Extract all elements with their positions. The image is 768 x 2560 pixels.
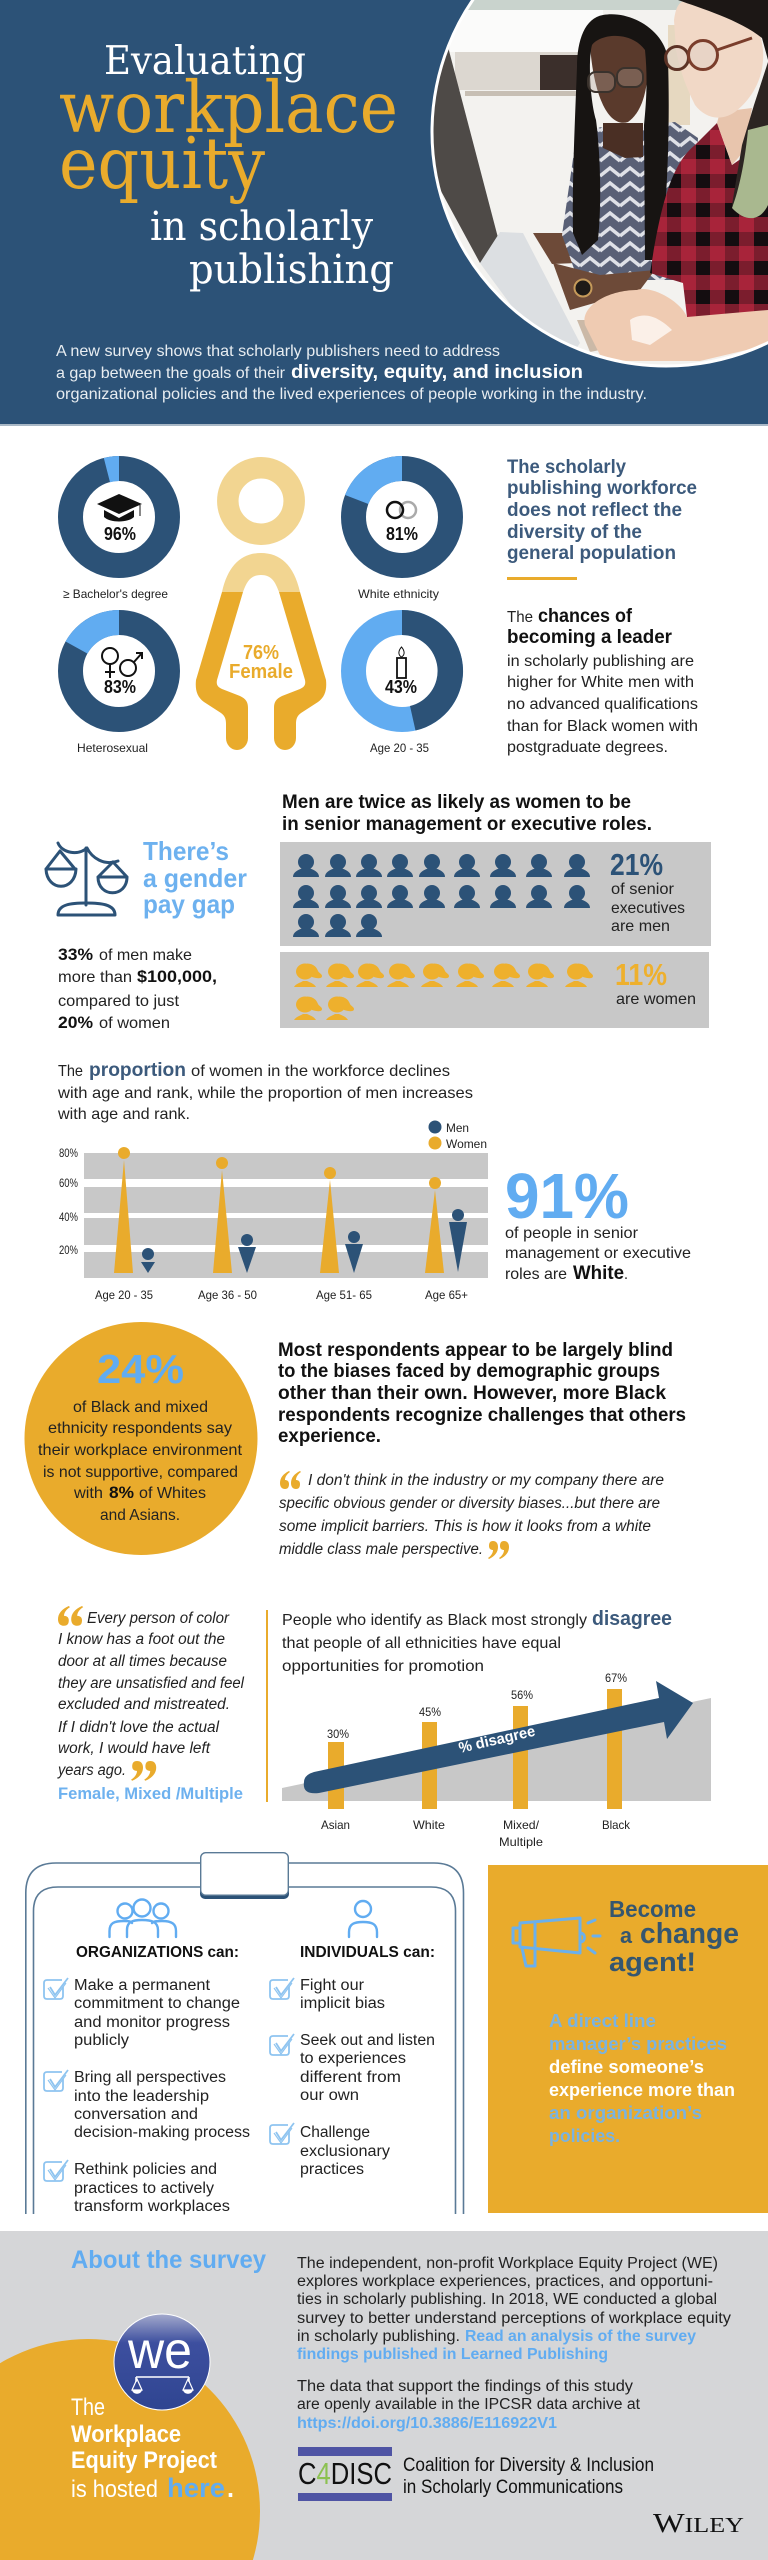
heading: there's a gender pay gap — [143, 836, 247, 919]
text: data availability: https://doi.org/10.3886/E116922V1 — [297, 2415, 557, 2432]
list: organizations can: Bring all perspectives — [74, 2069, 226, 2086]
heading: become a change agent — [609, 1896, 739, 1977]
chart: men and women by age: Age 51- 65 — [316, 1288, 372, 1302]
intro text: A new survey shows that scholarly publishers need to address — [56, 343, 500, 360]
logo: Wiley: W ILEY — [653, 2508, 744, 2538]
chart: percent disagree by ethnicity: 30% — [327, 1727, 349, 1741]
pictogram: women 11%: are women — [616, 991, 696, 1008]
text: direct line manager: policies. — [549, 2126, 620, 2146]
heading: become a change agent: agent! — [609, 1947, 696, 1977]
text: chances of becoming a leader: no advanced qualifications — [507, 696, 698, 713]
text: direct line manager: experience more than — [549, 2080, 735, 2100]
text: workplace equity project hosted here: is hosted — [71, 2476, 158, 2503]
intro text: diversity, equity, and inclusion — [291, 362, 583, 383]
stat: 91% white: roles are — [505, 1266, 567, 1283]
quote: person of color: years ago. — [57, 1762, 126, 1779]
donut: bachelor's degree 96%: 96% — [104, 524, 136, 544]
text: data availability: are openly available in the IPCSR data archive at — [297, 2396, 641, 2413]
heading: there's a gender pay gap: pay gap — [143, 889, 235, 919]
chart: percent disagree by ethnicity: Multiple — [499, 1835, 543, 1849]
intro text — [56, 343, 647, 403]
chart: men and women by age: 20% — [59, 1243, 78, 1257]
chart: men and women by age: Age 20 - 35 — [95, 1288, 153, 1302]
panel: blind to biases — [278, 1340, 686, 1559]
list: individuals can: Fight our — [300, 1977, 364, 1994]
title: Evaluating — [104, 39, 306, 84]
heading: about the survey: About the survey — [71, 2246, 266, 2274]
donut: heterosexual 83% — [66, 610, 168, 755]
icon: individual person — [349, 1901, 377, 1937]
intro text: organizational policies and the lived experiences of people working in the industry. — [56, 386, 647, 403]
panel: senior management pictogram — [280, 792, 711, 1028]
text: direct line manager: manager’s practices — [549, 2034, 727, 2054]
quote: person of color — [57, 1606, 245, 1803]
heading: workforce diversity: The scholarly — [507, 457, 626, 478]
list: individuals can: practices — [300, 2161, 364, 2178]
callout: 24% gold circle: and Asians. — [100, 1507, 180, 1524]
quote: implicit barriers: middle class male perspective. — [279, 1541, 483, 1558]
list: organizations can: conversation and — [74, 2106, 198, 2123]
heading: most respondents — [278, 1340, 686, 1447]
title: workplace — [59, 66, 398, 149]
panel: become a change agent — [488, 1865, 768, 2213]
pictogram: men 21%: executives — [611, 900, 685, 917]
text: workplace equity project hosted here: here — [167, 2473, 225, 2503]
logo: C4DISC: C4DISC — [298, 2456, 392, 2491]
title: in scholarly — [150, 204, 373, 250]
stat: 91% white: White — [573, 1263, 624, 1284]
text: chances of becoming a leader: postgraduate degrees. — [507, 739, 668, 756]
pictogram: women 11% — [280, 952, 709, 1028]
quote: person of color: excluded and mistreated. — [58, 1696, 230, 1713]
list: individuals can: INDIVIDUALS can: — [300, 1944, 435, 1961]
stat: 91% white: . — [624, 1266, 628, 1283]
text: workplace equity project hosted here: Workplace — [71, 2421, 181, 2448]
text: proportion of women: with age and rank. — [57, 1106, 190, 1123]
text: people who identify as Black: People who identify as Black most strongly — [282, 1612, 587, 1629]
pictogram: men 21%: of senior — [611, 881, 675, 898]
logo: WE: we — [127, 2322, 192, 2380]
list: organizations can: decision-making process — [74, 2124, 250, 2141]
chart: men and women by age: 40% — [59, 1210, 78, 1224]
chart: percent disagree by ethnicity: Black — [602, 1818, 631, 1832]
text: proportion of women: proportion — [89, 1060, 186, 1081]
logo: C4DISC: Coalition for Diversity & Inclusion — [403, 2455, 654, 2476]
text: workplace equity project hosted here — [71, 2394, 234, 2503]
panel: gender pay gap — [46, 836, 247, 1032]
header panel — [0, 0, 768, 426]
stat: 91% white: 91% — [505, 1160, 629, 1232]
list: individuals can: Challenge — [300, 2124, 370, 2141]
quote: implicit barriers: some implicit barriers. This is how it looks from a white — [279, 1518, 651, 1535]
callout: 24% gold circle: with — [73, 1485, 103, 1502]
text: survey description: Read an analysis of the survey — [465, 2328, 696, 2345]
quote: person of color: door at all times because — [58, 1653, 227, 1670]
donut: heterosexual 83%: 83% — [104, 677, 136, 697]
text: survey description: survey to better understand perceptions of workplace equity — [297, 2310, 731, 2327]
callout: 24% gold circle: their workplace environment — [38, 1442, 243, 1459]
panel: clipboard of actions — [26, 1853, 464, 2215]
text: proportion of women: The — [58, 1063, 83, 1080]
text: chances of becoming a leader: chances of — [538, 606, 633, 627]
list: organizations can: commitment to change — [74, 1995, 240, 2012]
text: survey description: explores workplace experiences, practices, and opportuni- — [297, 2273, 713, 2290]
text: pay gap statistics: of men make — [99, 947, 192, 964]
chart: percent disagree by ethnicity: White — [413, 1818, 445, 1832]
callout: 24% gold circle: 8% — [109, 1483, 134, 1502]
text: chances of becoming a leader: than for Black women with — [507, 718, 698, 735]
heading: become a change agent: Become — [609, 1896, 696, 1922]
text: pay gap statistics — [58, 945, 217, 1032]
text: direct line manager: an organization’s — [549, 2103, 702, 2123]
list: individuals can: to experiences — [300, 2050, 406, 2067]
heading: men twice as likely: Men are twice as likely as women to be — [282, 792, 631, 813]
callout: 24% gold circle: 24% — [97, 1346, 184, 1392]
quote: person of color: work, I would have left — [58, 1740, 211, 1757]
icon: megaphone — [513, 1918, 600, 1966]
chart: men and women by age — [59, 1146, 488, 1302]
arrow: % disagree: % disagree — [457, 1723, 537, 1757]
text: pay gap statistics: of women — [99, 1015, 170, 1032]
heading: workforce diversity: diversity of the — [507, 522, 642, 543]
title — [59, 39, 398, 293]
list: organizations can: practices to actively — [74, 2180, 214, 2197]
heading: most respondents: experience. — [278, 1426, 381, 1447]
icon: scales — [46, 843, 127, 915]
callout: 24% gold circle: is not supportive, compared — [43, 1464, 238, 1481]
list: individuals can: exclusionary — [300, 2143, 390, 2160]
pictogram: men 21%: 21% — [610, 847, 663, 882]
list: organizations can: ORGANIZATIONS can: — [76, 1944, 239, 1961]
quote: implicit barriers: specific obvious gender or diversity biases...but there are — [279, 1495, 660, 1512]
quote: person of color: Every person of color — [87, 1610, 230, 1627]
text: workplace equity project hosted here: Equity Project — [71, 2447, 217, 2474]
heading: workforce diversity — [507, 457, 697, 580]
callout: 24% gold circle: of Black and mixed — [73, 1399, 208, 1416]
callout: 24% gold circle: ethnicity respondents say — [48, 1420, 232, 1437]
donut: age 20-35 43%: Age 20 - 35 — [370, 741, 429, 755]
chart: percent disagree by ethnicity: 67% — [605, 1671, 627, 1685]
list: organizations can: publicly — [74, 2032, 129, 2049]
list: organizations can: transform workplaces — [74, 2198, 230, 2215]
stat: 91% white — [505, 1160, 691, 1284]
quote: implicit barriers — [279, 1471, 664, 1559]
text: proportion of women: with age and rank, while the proportion of men increases — [57, 1085, 473, 1102]
chart: percent disagree by ethnicity: 45% — [419, 1705, 441, 1719]
list: organizations can — [44, 1944, 250, 2215]
text: chances of becoming a leader: The — [507, 609, 533, 626]
icon: person figure 76% female — [196, 468, 326, 750]
donut: heterosexual 83%: Heterosexual — [77, 741, 148, 755]
text: survey description: in scholarly publishing. — [297, 2328, 460, 2345]
text: people who identify as Black — [282, 1608, 672, 1675]
donut: bachelor's degree 96% — [63, 456, 168, 601]
heading: there's a gender pay gap: There’s — [143, 836, 229, 866]
quote: person of color: I know has a foot out the — [58, 1631, 225, 1648]
heading: become a change agent: change — [640, 1918, 739, 1950]
donut: white ethnicity 81%: White ethnicity — [358, 587, 439, 601]
text: chances of becoming a leader: becoming a leader — [507, 627, 673, 648]
icon: person figure 76% female: Female — [229, 661, 293, 683]
arrow: % disagree — [304, 1681, 693, 1793]
text: chances of becoming a leader: in scholarly publishing are — [507, 653, 694, 670]
panel: workforce demographics — [63, 456, 698, 756]
text: pay gap statistics: more than — [58, 969, 132, 986]
chart: men and women by age: 80% — [59, 1146, 78, 1160]
heading: there's a gender pay gap: a gender — [143, 863, 247, 893]
list: organizations can: and monitor progress — [74, 2014, 230, 2031]
chart: percent disagree by ethnicity — [282, 1671, 711, 1849]
list: individuals can: different from — [300, 2069, 401, 2086]
list: organizations can: into the leadership — [74, 2088, 209, 2105]
list: individuals can — [270, 1944, 435, 2178]
heading: most respondents: Most respondents appear to be largely blind — [278, 1340, 673, 1361]
text: survey description: ties in scholarly publishing. In 2018, WE conducted a global — [297, 2291, 717, 2308]
text: workplace equity project hosted here: . — [227, 2473, 234, 2503]
logo: WE — [114, 2314, 210, 2410]
text: direct line manager: A direct line — [549, 2011, 656, 2031]
title: publishing — [189, 247, 394, 293]
text: pay gap statistics: compared to just — [58, 993, 180, 1010]
heading: workforce diversity: does not reflect the — [507, 500, 682, 521]
donut: white ethnicity 81%: 81% — [386, 524, 418, 544]
heading: workforce diversity: publishing workforce — [507, 478, 697, 499]
text: people who identify as Black: that people of all ethnicities have equal — [282, 1635, 561, 1652]
chart: percent disagree by ethnicity: 56% — [511, 1688, 533, 1702]
intro text: a gap between the goals of their — [56, 365, 286, 382]
text: chances of becoming a leader: higher for White men with — [507, 674, 694, 691]
heading: men twice as likely: in senior management or executive roles. — [282, 814, 652, 835]
heading: most respondents: respondents recognize challenges that others — [278, 1405, 686, 1426]
pictogram: men 21%: are men — [611, 918, 670, 935]
heading: become a change agent: a — [620, 1923, 633, 1948]
logo: C4DISC — [298, 2447, 654, 2501]
icon: organizations people — [110, 1900, 176, 1937]
text: survey description: findings published in Learned Publishing — [297, 2346, 608, 2363]
donut: white ethnicity 81% — [345, 456, 450, 601]
heading: workforce diversity: general population — [507, 543, 676, 564]
text: people who identify as Black: disagree — [592, 1608, 672, 1630]
heading: most respondents: other than their own. However, more Black — [278, 1383, 666, 1404]
pictogram: men 21% — [280, 842, 711, 946]
text: workplace equity project hosted here: The — [71, 2394, 105, 2421]
heading: most respondents: to the biases faced by demographic groups — [278, 1361, 660, 1382]
text: direct line manager: define someone’s — [549, 2057, 704, 2077]
list: individuals can: Seek out and listen — [300, 2032, 435, 2049]
text: pay gap statistics: 20% — [58, 1013, 93, 1032]
chart: percent disagree by ethnicity: Mixed/ — [503, 1818, 540, 1832]
text: pay gap statistics: 33% — [58, 945, 93, 964]
chart legend — [428, 1120, 487, 1151]
stat: 91% white: management or executive — [505, 1245, 691, 1262]
text: data availability: The data that support the findings of this study — [297, 2378, 633, 2395]
text: direct line manager — [549, 2011, 735, 2146]
quote: implicit barriers: I don't think in the industry or my company there are — [308, 1472, 664, 1489]
panel: proportion by age chart — [57, 1060, 691, 1302]
text: chances of becoming a leader — [507, 606, 698, 756]
chart: percent disagree by ethnicity: Asian — [321, 1818, 350, 1832]
donut: age 20-35 43%: 43% — [385, 677, 417, 697]
callout: 24% gold circle — [24, 1322, 258, 1555]
chart: men and women by age: Age 36 - 50 — [198, 1288, 257, 1302]
chart legend: Men — [446, 1121, 469, 1135]
quote: person of color: they are unsatisfied and feel — [58, 1675, 245, 1692]
list: organizations can: Rethink policies and — [74, 2161, 217, 2178]
list: organizations can: Make a permanent — [74, 1977, 211, 1994]
text: data availability — [297, 2378, 641, 2432]
donut: bachelor's degree 96%: ≥ Bachelor's degree — [63, 587, 168, 601]
chart legend: Women — [446, 1137, 487, 1151]
chart: men and women by age: 60% — [59, 1176, 78, 1190]
logo: C4DISC: in Scholarly Communications — [403, 2477, 623, 2498]
quote: person of color: If I didn't love the actual — [58, 1719, 220, 1736]
text: survey description — [297, 2255, 731, 2363]
text: survey description: The independent, non-profit Workplace Equity Project (WE) — [297, 2255, 718, 2272]
callout: 24% gold circle: of Whites — [139, 1485, 206, 1502]
text: people who identify as Black: opportunities for promotion — [282, 1658, 484, 1675]
text: pay gap statistics: $100,000, — [137, 967, 217, 986]
pictogram: women 11%: 11% — [615, 957, 667, 992]
gold circle — [0, 2339, 260, 2560]
list: individuals can: implicit bias — [300, 1995, 385, 2012]
text: proportion of women: of women in the workforce declines — [191, 1063, 450, 1080]
donut: age 20-35 43% — [354, 610, 463, 755]
icon: person figure 76% female: 76% — [243, 642, 279, 664]
heading: men twice as likely — [282, 792, 652, 835]
chart: men and women by age: Age 65+ — [425, 1288, 468, 1302]
panel: disagree chart — [266, 1608, 711, 1849]
text: proportion of women — [57, 1060, 473, 1123]
quote: person of color: Female, Mixed /Multiple — [58, 1785, 243, 1803]
panel: about the survey — [0, 2231, 768, 2560]
list: individuals can: our own — [300, 2087, 359, 2104]
photo of two women at a computer — [420, 0, 768, 380]
stat: 91% white: of people in senior — [505, 1225, 639, 1242]
title: equity — [59, 122, 265, 205]
